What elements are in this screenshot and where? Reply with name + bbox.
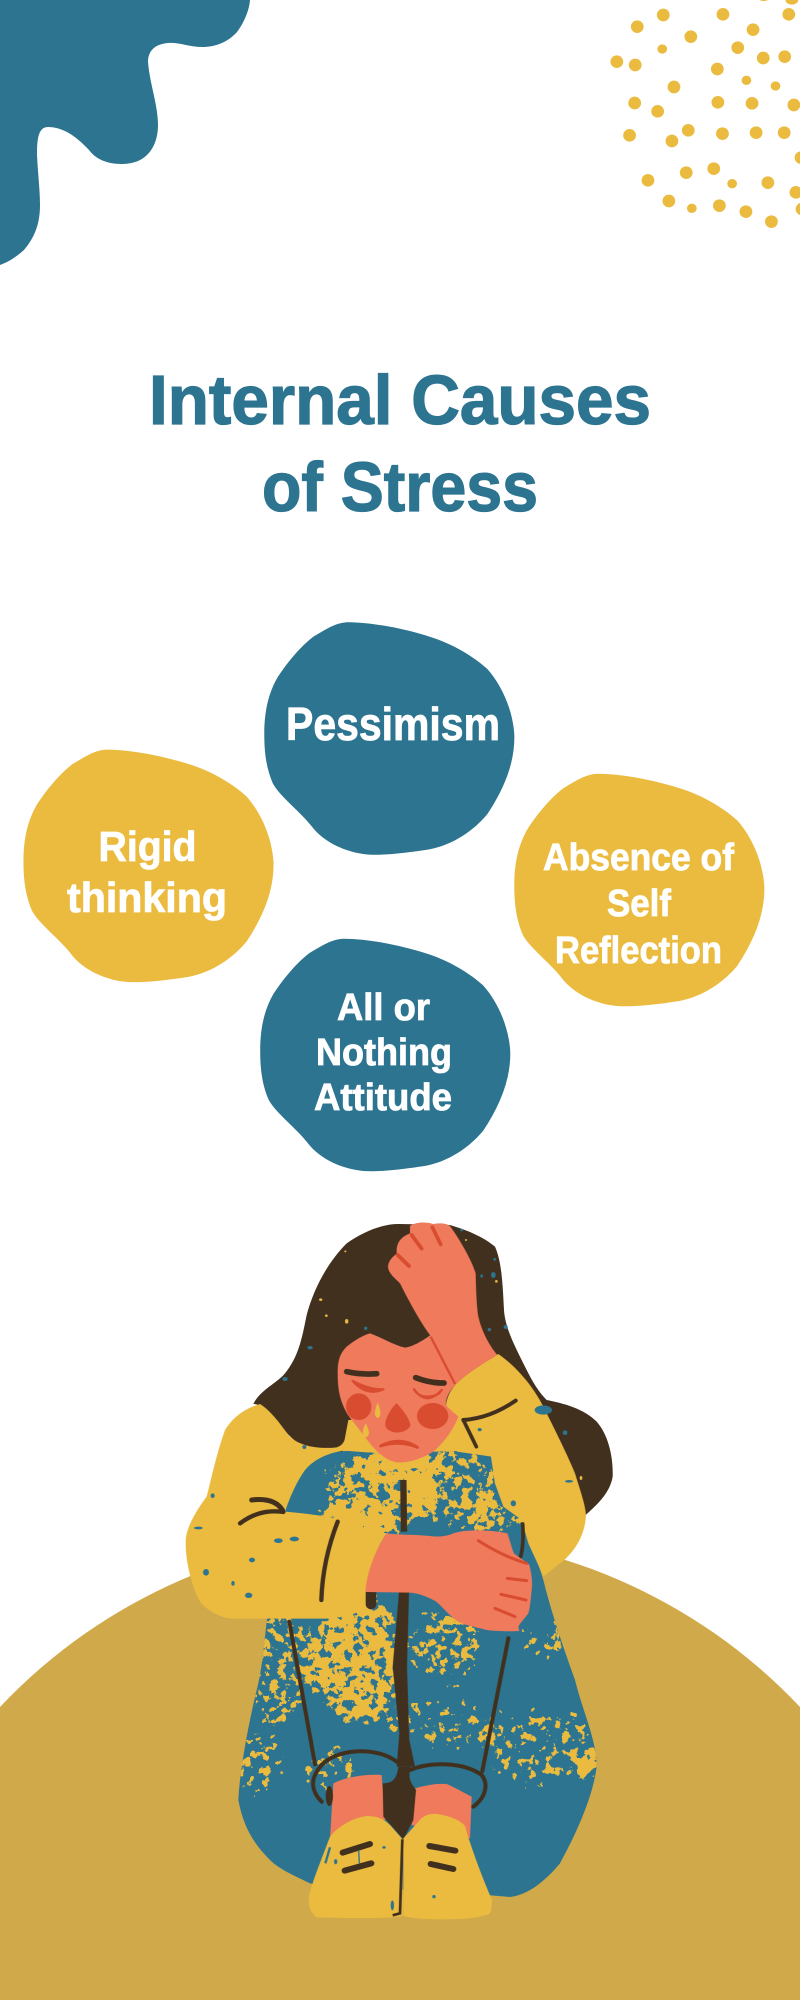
jacket fold lines [240, 1401, 523, 1600]
leg lines [289, 1622, 508, 1771]
bubble: All or Nothing Attitude: Nothing [316, 1032, 452, 1074]
bubble: Rigid thinking: Rigid [98, 823, 196, 870]
bubble: Absence of Self Reflection: Reflection [555, 930, 722, 972]
knee cuffs [313, 1751, 485, 1807]
bubble: Absence of Self Reflection: Absence of [543, 837, 734, 879]
bubble: Rigid thinking [23, 750, 274, 982]
decorative dots: top-right corner [610, 0, 800, 228]
bubble: Pessimism: Pessimism [286, 698, 500, 750]
decorative blob: top-left corner [0, 0, 250, 265]
bubble: All or Nothing Attitude: All or [337, 987, 430, 1029]
dark gap between legs [383, 1767, 416, 1839]
ankles [330, 1775, 472, 1838]
lower hand [365, 1530, 532, 1631]
bubble: All or Nothing Attitude [260, 939, 510, 1171]
bubble: Absence of Self Reflection [514, 774, 764, 1006]
dress body [238, 1450, 597, 1897]
torso yoke [337, 1413, 503, 1533]
title [149, 361, 651, 526]
dress distressed texture [227, 1443, 607, 1797]
bubble: Pessimism [264, 622, 514, 855]
title: Internal Causes [149, 361, 651, 439]
face [338, 1333, 458, 1463]
hair [253, 1224, 613, 1517]
shoe laces and seam [343, 1844, 455, 1871]
finger lines [478, 1541, 527, 1617]
shoes [309, 1814, 492, 1919]
bubble: All or Nothing Attitude: Attitude [314, 1077, 452, 1119]
ground hill [0, 1534, 800, 2000]
right sleeve [446, 1354, 586, 1576]
paint specks [194, 1229, 573, 1910]
jacket hem marks [355, 1593, 387, 1604]
raised arm and hand [388, 1222, 497, 1384]
title: of Stress [262, 448, 538, 526]
bubble: Absence of Self Reflection: Self [607, 883, 671, 925]
bubble: Rigid thinking: thinking [67, 874, 227, 921]
left sleeve [186, 1404, 387, 1619]
face details [346, 1227, 455, 1447]
zip and centre seam [393, 1592, 415, 1767]
illustration: sad girl hugging knees [186, 1222, 613, 1919]
